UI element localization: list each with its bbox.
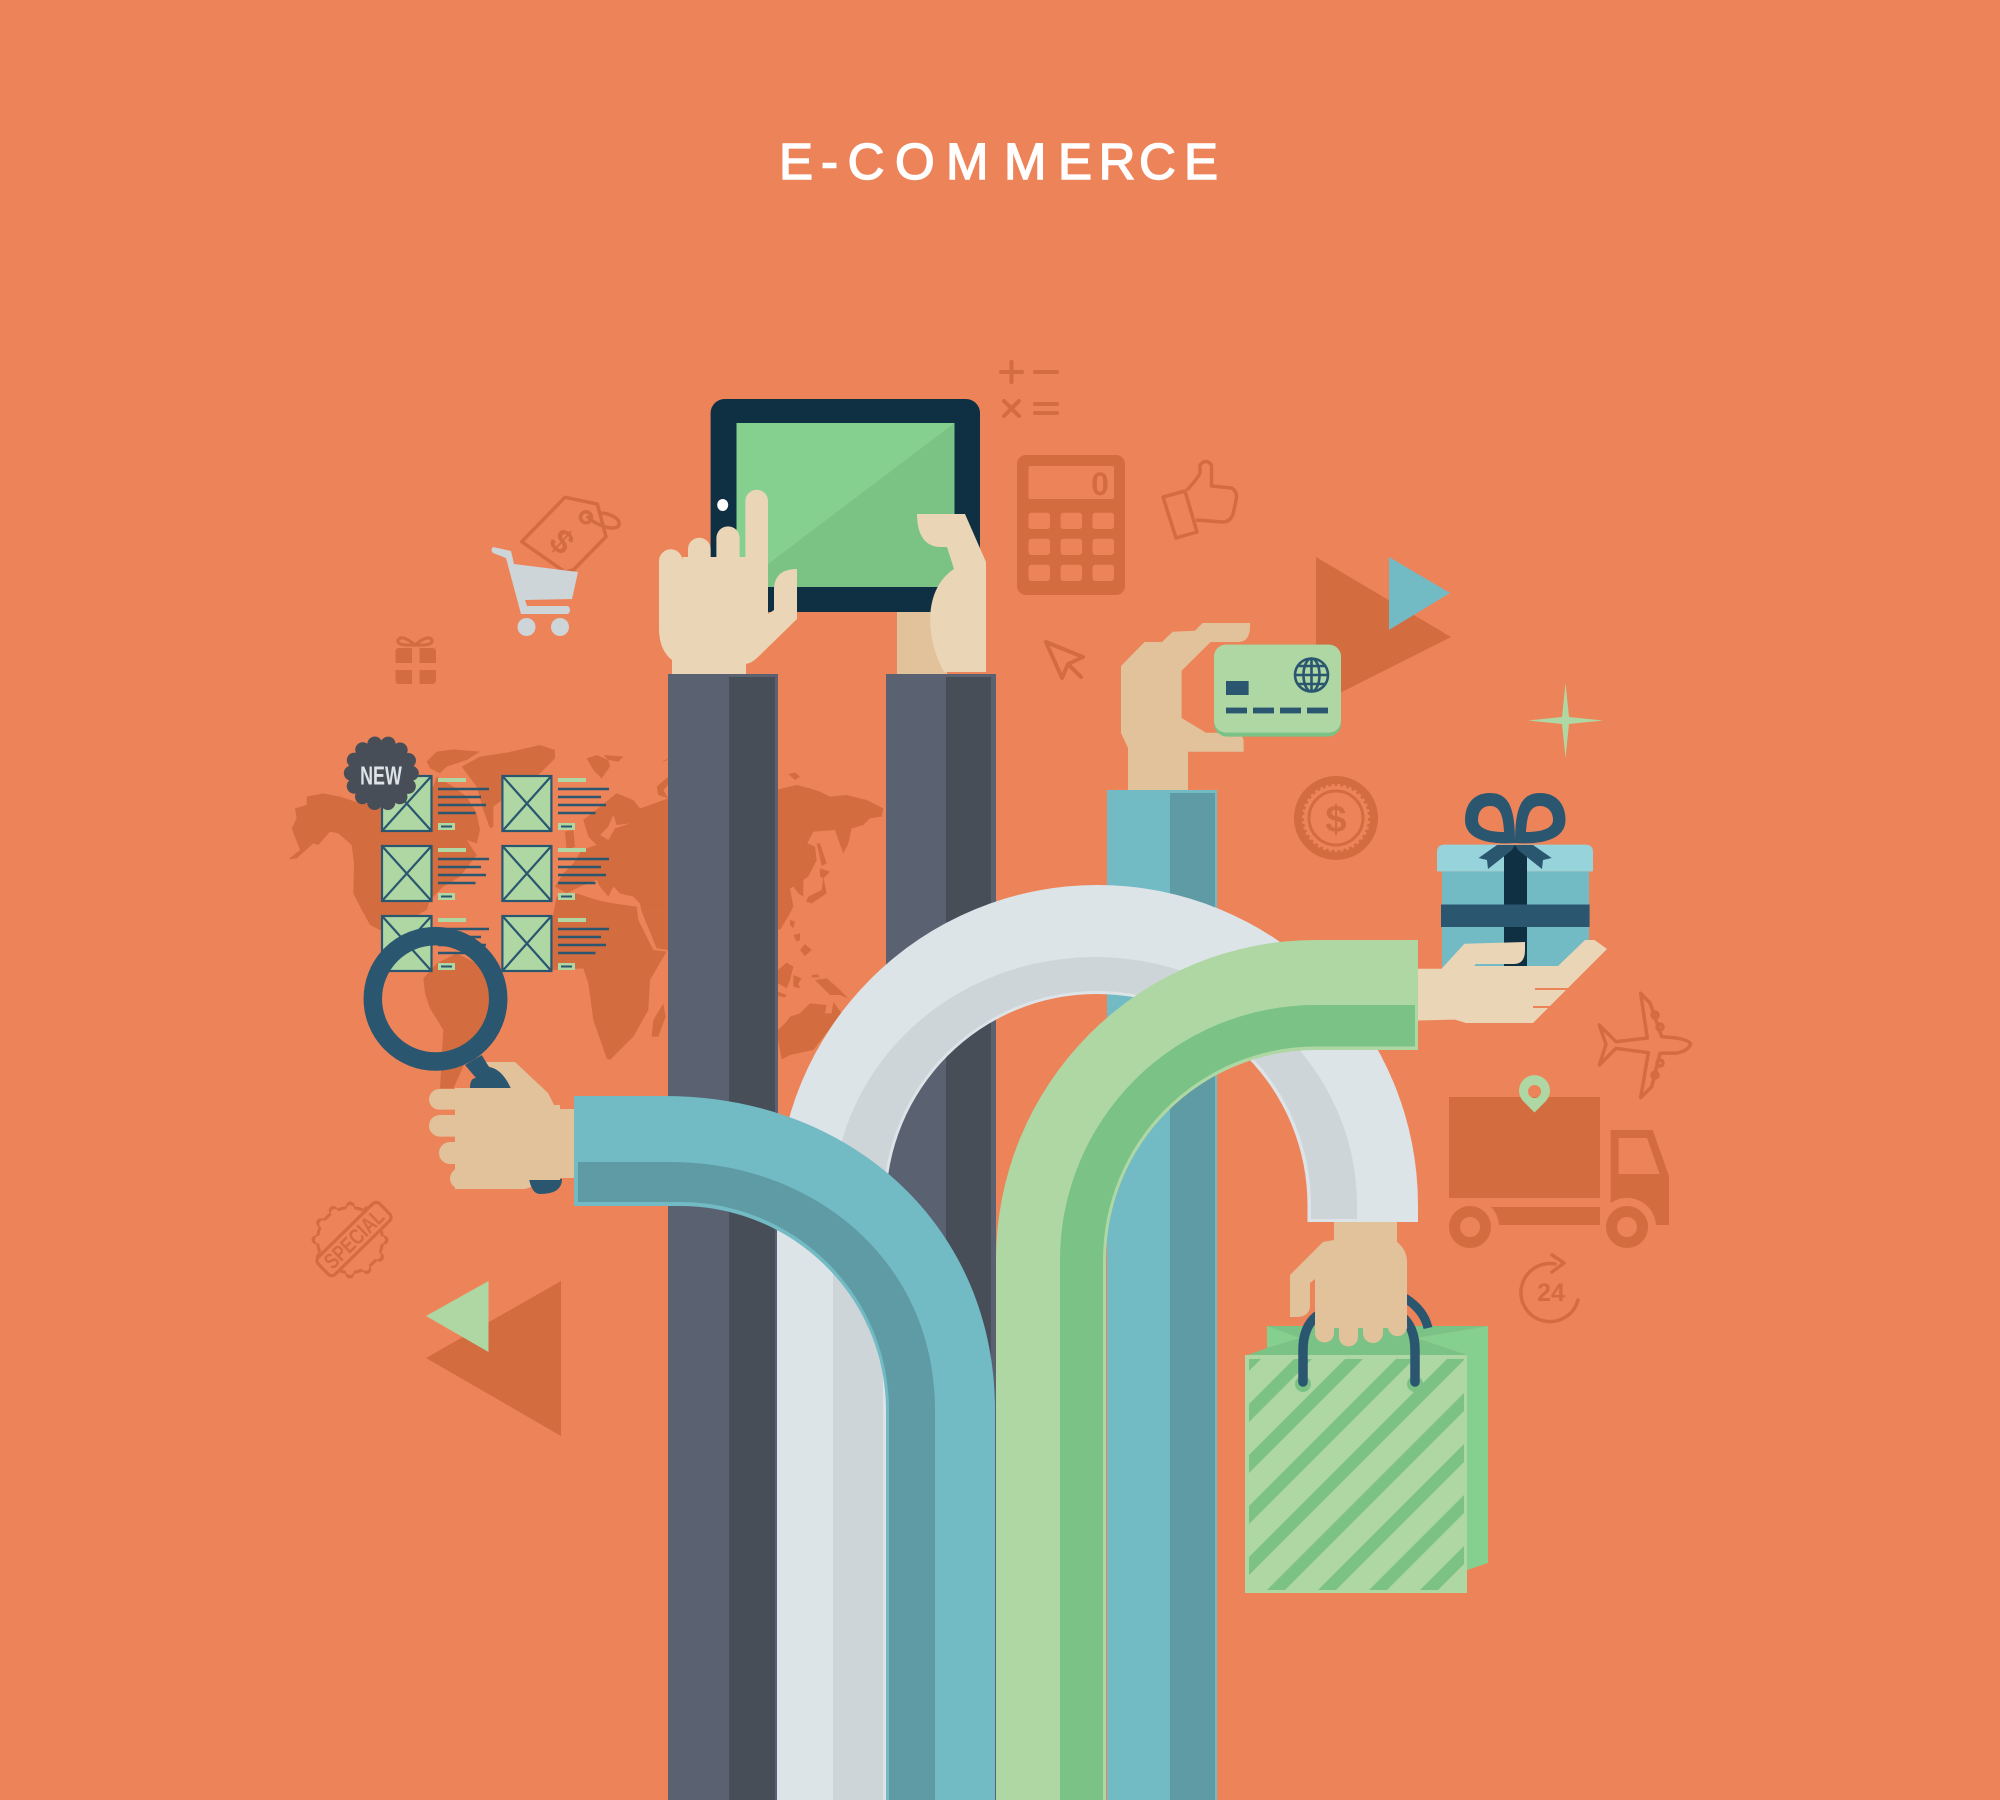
front handle [1303, 1305, 1415, 1382]
icon: thumbs up [1163, 462, 1236, 538]
icon: location pin [1519, 1075, 1550, 1112]
hand: holding tablet [897, 514, 986, 674]
icon: calculator: 0 [1091, 466, 1109, 502]
product text lines 2 [558, 780, 609, 830]
hand: presenting gift [1418, 940, 1607, 1023]
sleeve: teal arm vertical [1107, 790, 1217, 1800]
sleeve: dark arm right [886, 674, 996, 1800]
icon: 24 hour [1521, 1255, 1578, 1322]
icon: 24 hour: 24 [1537, 1279, 1565, 1307]
special band: SPECIAL [319, 1204, 389, 1274]
gift box [1437, 793, 1593, 968]
gift bow [1465, 793, 1566, 869]
title: E-COMMERCE [779, 133, 1218, 190]
icon: small gift [396, 638, 436, 684]
sleeve: white arch [777, 885, 1418, 1800]
product row 3 left [382, 916, 432, 971]
icon: math symbols [1001, 362, 1057, 416]
hand gripping bag [1290, 1222, 1407, 1346]
hand: holding credit card [1121, 623, 1250, 795]
hand and magnifying glass [373, 936, 574, 1194]
icon: price tag [522, 497, 619, 572]
icon: airplane [1599, 993, 1691, 1098]
hand: tapping tablet [659, 490, 797, 674]
credit card [1214, 645, 1341, 737]
icon: delivery truck [1449, 1097, 1669, 1242]
product row 1 right [502, 776, 551, 831]
icon: calculator [1017, 455, 1125, 595]
palm [455, 1062, 574, 1189]
icon: dollar coin: $ [1325, 799, 1347, 841]
product text lines 3 [438, 850, 489, 900]
scalloped seal [316, 1206, 384, 1274]
fingers [429, 1089, 560, 1189]
product listing grid [382, 776, 609, 971]
back handle [1405, 1298, 1428, 1328]
icon: shopping cart [492, 547, 578, 636]
tablet [711, 399, 980, 612]
big left triangle [426, 1281, 561, 1436]
product text lines 4 [558, 850, 609, 900]
infographic canvas [288, 142, 1692, 1800]
product text lines 1 [438, 780, 489, 830]
product row 2 right [502, 846, 551, 901]
big right triangle [1316, 557, 1451, 705]
icon: cursor arrow [1046, 642, 1083, 678]
hand: holding shopping bag and bag [1245, 1222, 1488, 1593]
sleeve: green arch [996, 940, 1418, 1800]
sleeve: teal arm from left [574, 1096, 995, 1800]
bag front panel [1245, 1355, 1467, 1593]
small green triangle [426, 1281, 488, 1352]
icon: dollar coin [1298, 780, 1374, 856]
small teal triangle [1389, 557, 1450, 630]
world map [288, 745, 883, 1088]
badge: special [315, 1200, 393, 1278]
icon: sparkle star [1528, 683, 1603, 758]
magnifying glass [373, 936, 562, 1194]
sleeve: dark arm left [668, 674, 778, 1800]
icon: price tag: $ [542, 521, 581, 562]
product text lines 6 [558, 920, 609, 970]
product row 1 left [382, 776, 432, 831]
badge: new [351, 743, 411, 803]
badge: new: NEW [360, 762, 402, 790]
bag back panel [1245, 1326, 1488, 1570]
product text lines 5 [438, 920, 489, 970]
product row 2 left [382, 846, 432, 901]
product row 3 right [502, 916, 551, 971]
